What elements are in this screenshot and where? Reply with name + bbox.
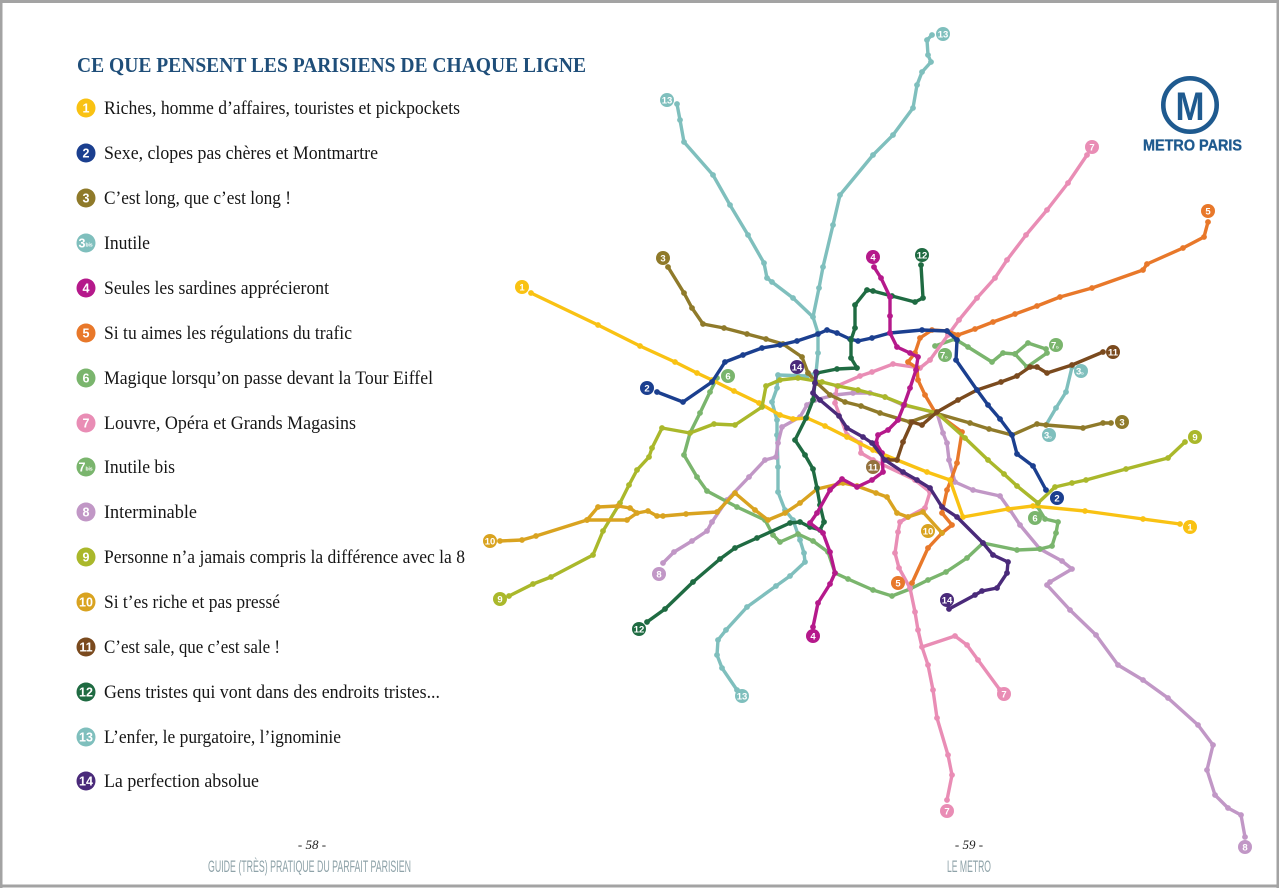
badges: line 7: 7 <box>944 806 950 818</box>
legend row: line 7bis: bis <box>85 466 93 472</box>
footer: left page: - 58 - <box>298 837 326 852</box>
badges: line 6: 6 <box>725 372 731 382</box>
legend row: line 3bis: bis <box>85 242 93 248</box>
title: CE QUE PENSENT LES PARISIENS DE CHAQUE LIGNE <box>77 53 586 77</box>
footer: right page <box>947 837 991 876</box>
line 6 <box>684 378 1058 596</box>
line 10 east part <box>637 483 942 533</box>
badges: line 10: 10 <box>923 526 933 538</box>
badges: line 3bis <box>1042 364 1088 442</box>
legend row: line 5: 5 <box>83 326 90 340</box>
badges: line 10 <box>483 524 935 548</box>
badges: line 2: 2 <box>1054 494 1060 504</box>
line terminus badges <box>483 27 1252 854</box>
line 9 <box>509 378 1185 596</box>
badges: line 2: 2 <box>644 384 650 394</box>
footer: left page <box>208 837 411 876</box>
badges: line 5: 5 <box>895 578 901 590</box>
logo: Metro Paris <box>1143 78 1242 154</box>
legend row: line 12: Gens tristes qui vont dans des endroits tristes... <box>104 683 440 703</box>
badges: line 8: 8 <box>1242 842 1248 854</box>
line 13 north branch <box>813 35 932 317</box>
badges: line 11: 11 <box>868 462 879 474</box>
badges: line 9: 9 <box>497 594 503 606</box>
legend row: line 4: 4 <box>83 282 90 296</box>
line 8 <box>663 393 1245 837</box>
badges: line 12 <box>632 248 929 636</box>
badges: line 13: 13 <box>662 96 672 106</box>
legend row: line 10: Si t’es riche et pas pressé <box>104 593 280 613</box>
legend row: line 3bis <box>76 234 150 254</box>
badges: line 1: 1 <box>1187 522 1193 534</box>
badges: line 13: 13 <box>737 692 747 702</box>
legend row: line 1: Riches, homme d’affaires, touristes et pickpockets <box>104 99 460 119</box>
badges: line 9: 9 <box>1192 432 1198 444</box>
legend: opinions by line <box>76 98 465 792</box>
legend row: line 3bis: Inutile <box>104 234 150 254</box>
legend row: line 14: La perfection absolue <box>104 772 259 792</box>
legend row: line 14: 14 <box>79 774 93 788</box>
badges: line 12: 12 <box>634 624 644 636</box>
line 3bis <box>1046 367 1072 425</box>
legend row: line 7: Louvre, Opéra et Grands Magasins <box>104 414 356 434</box>
logo: Metro Paris: M <box>1176 85 1204 129</box>
badges: line 10: 10 <box>485 536 495 548</box>
legend row: line 8: Interminable <box>104 503 197 523</box>
badges: line 4: 4 <box>810 632 816 642</box>
badges: line 14: 14 <box>792 362 803 374</box>
badges: line 4 <box>806 250 880 643</box>
footer: left page: GUIDE (TRÈS) PRATIQUE DU PARFAIT PARISIEN <box>208 857 411 876</box>
badges: line 6: 6 <box>1032 514 1038 524</box>
badges: line 4: 4 <box>870 252 876 264</box>
legend row: line 7: 7 <box>83 416 90 430</box>
legend row: line 6: Magique lorsqu’on passe devant la Tour Eiffel <box>104 369 433 389</box>
badges: line 5: 5 <box>1205 206 1211 218</box>
badges: line 14: 14 <box>942 596 953 606</box>
legend row: line 2: 2 <box>83 146 90 160</box>
badges: line 7: 7 <box>1001 690 1007 700</box>
badges: line 8 <box>652 567 1252 854</box>
line 5 <box>908 222 1208 583</box>
legend row: line 10: 10 <box>79 596 93 610</box>
badges: line 9 <box>493 430 1202 606</box>
badges: line 6 <box>721 369 1042 525</box>
badges: line 7: 7 <box>1089 142 1095 154</box>
line 13 <box>677 104 818 690</box>
legend row: line 3: 3 <box>83 192 90 206</box>
badges: line 8: 8 <box>656 570 662 580</box>
line 4 <box>810 267 918 627</box>
legend row: line 12: 12 <box>79 686 93 700</box>
line 11 <box>888 352 1103 460</box>
legend row: line 5: Si tu aimes les régulations du trafic <box>104 324 352 344</box>
badges: line 3bis: 3b <box>1044 430 1052 442</box>
legend row: line 1: 1 <box>83 102 90 116</box>
legend row: line 2: Sexe, clopes pas chères et Montmartre <box>104 144 378 164</box>
legend row: line 7bis: Inutile bis <box>104 458 175 478</box>
line 2 <box>657 330 1046 490</box>
line 7 south branch <box>922 636 1000 690</box>
badges: line 13 <box>660 27 950 703</box>
legend row: line 7bis: 7 <box>78 460 85 474</box>
line 10 <box>500 506 637 541</box>
badges: line 3 <box>656 251 1129 429</box>
badges: line 7bis: 7b <box>940 350 948 362</box>
line 14 <box>813 372 1008 609</box>
line 7 bis <box>935 339 1047 367</box>
badges: line 2 <box>640 381 1064 505</box>
badges: line 7 <box>940 140 1099 818</box>
line 7 <box>835 155 1087 800</box>
legend row: line 13: L’enfer, le purgatoire, l’ignominie <box>104 728 341 748</box>
metro map <box>483 27 1252 854</box>
legend row: line 4: Seules les sardines apprécieront <box>104 279 330 299</box>
badges: line 13: 13 <box>938 30 948 40</box>
badges: line 3: 3 <box>660 254 666 264</box>
badges: line 1 <box>515 280 1197 534</box>
badges: line 14 <box>790 360 954 607</box>
legend row: line 7bis <box>76 458 175 478</box>
footer: right page: LE METRO <box>947 857 991 876</box>
legend row: line 9: Personne n’a jamais compris la différence avec la 8 <box>104 548 465 568</box>
legend row: line 3bis: 3 <box>78 236 85 250</box>
badges: line 7bis: 7b <box>1051 340 1059 352</box>
badges: line 3: 3 <box>1119 418 1125 428</box>
badges: line 5 <box>891 204 1215 590</box>
badges: line 11 <box>866 345 1120 474</box>
line 3 <box>668 267 1111 435</box>
footer: right page: - 59 - <box>955 837 983 852</box>
legend row: line 13: 13 <box>79 730 93 744</box>
badges: line 1: 1 <box>519 282 525 294</box>
legend row: line 6: 6 <box>83 372 90 386</box>
badges: line 12: 12 <box>917 250 927 262</box>
badges: line 3bis: 3b <box>1076 366 1084 378</box>
line 1 <box>531 293 1180 524</box>
legend row: line 11: C’est sale, que c’est sale ! <box>104 638 280 658</box>
legend row: line 3: C’est long, que c’est long ! <box>104 189 291 209</box>
logo: Metro Paris: METRO PARIS <box>1143 138 1242 154</box>
legend row: line 8: 8 <box>83 506 90 520</box>
legend row: line 11: 11 <box>79 640 93 654</box>
legend row: line 9: 9 <box>83 550 90 564</box>
line 12 <box>647 265 923 622</box>
badges: line 7bis <box>938 338 1063 362</box>
badges: line 11: 11 <box>1108 348 1119 358</box>
